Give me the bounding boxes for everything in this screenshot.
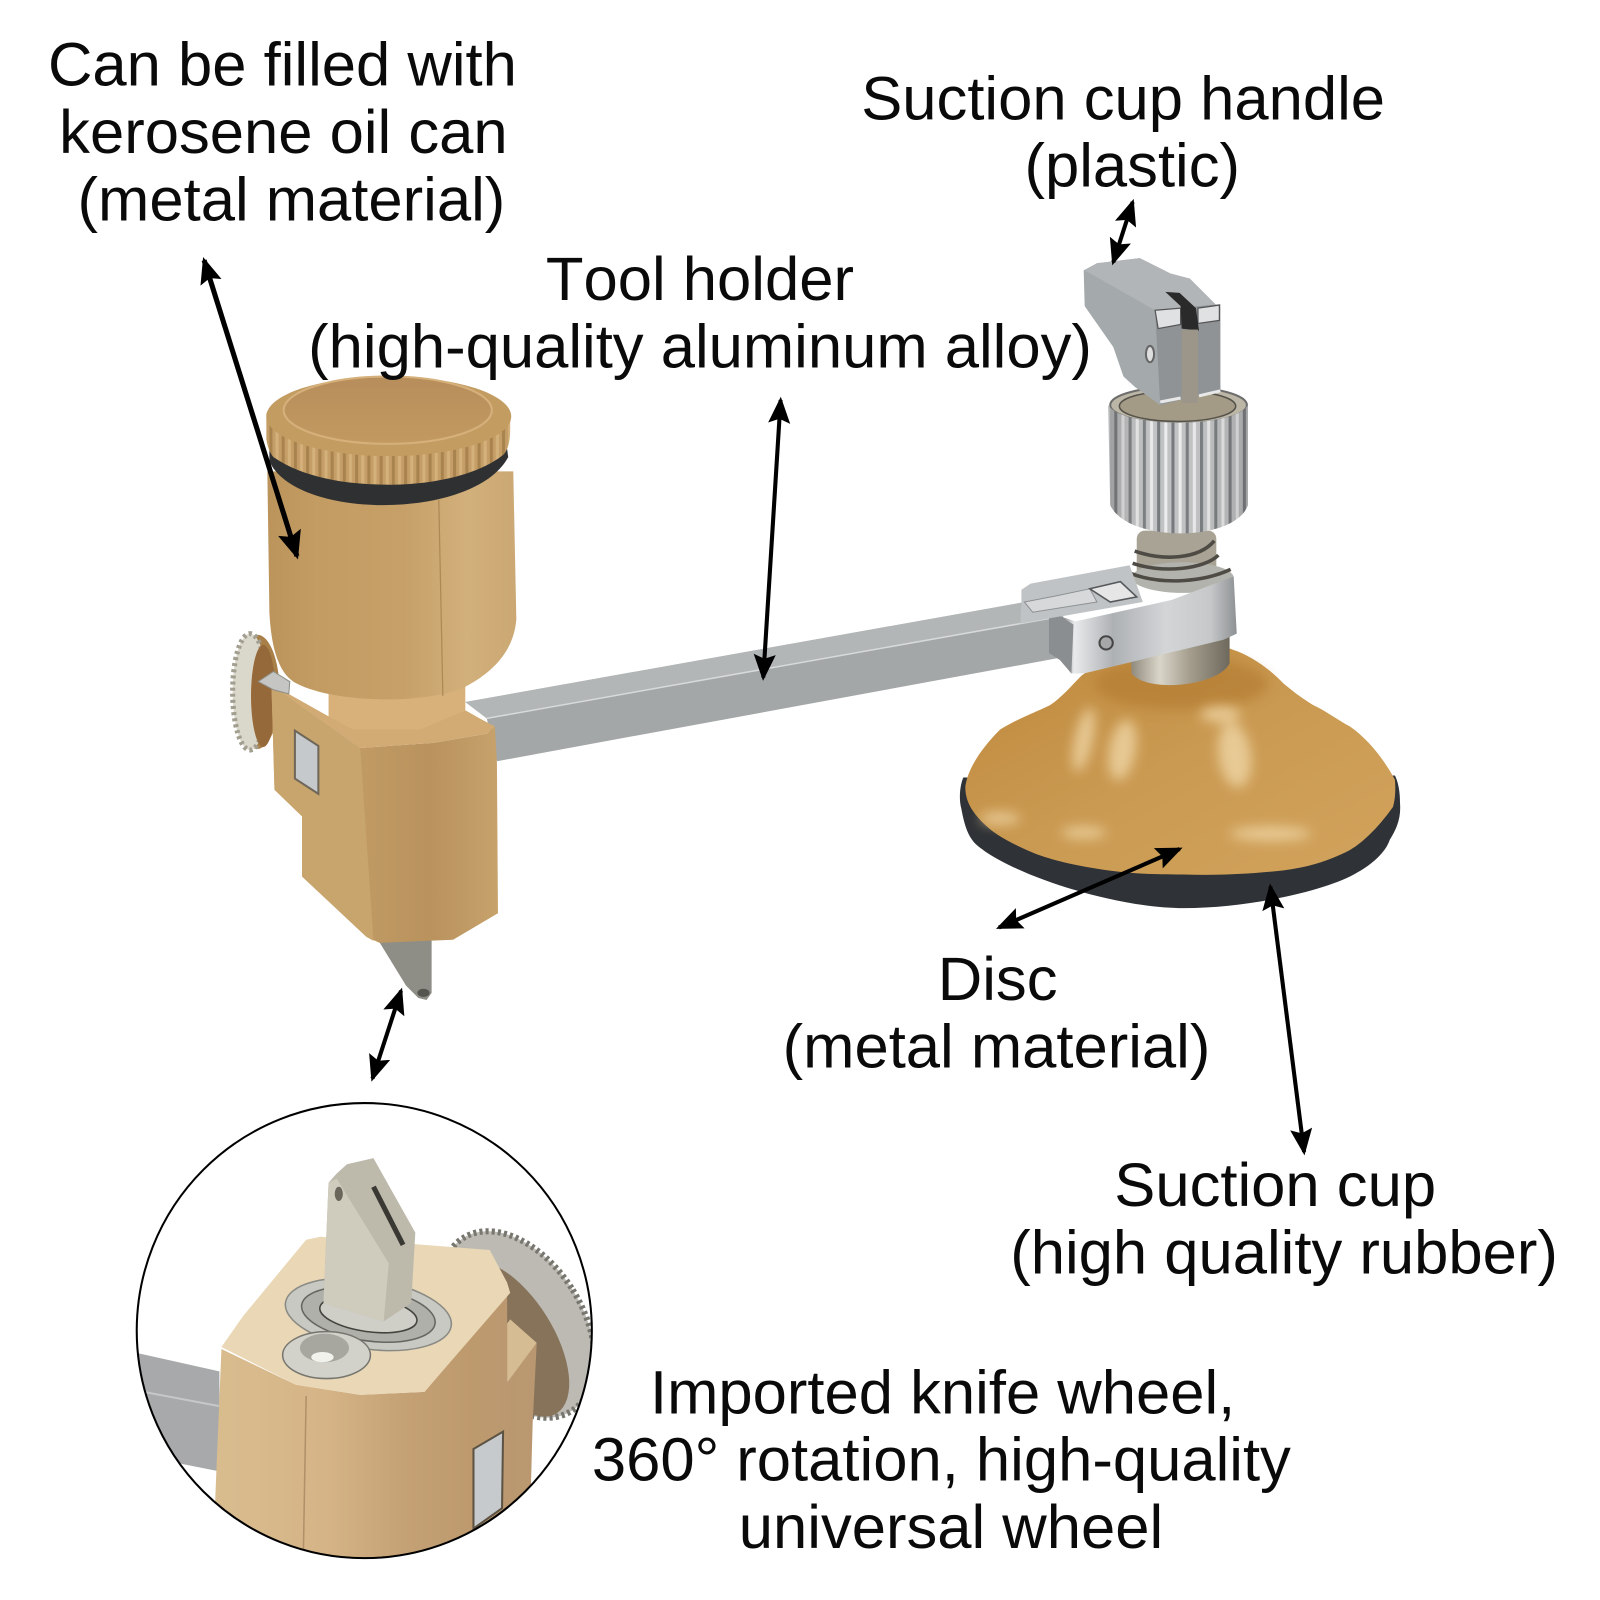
tool holder arm — [465, 601, 1063, 761]
arrow: oil can — [204, 260, 297, 556]
label: knife wheel: universal wheel — [739, 1493, 1163, 1562]
label: suction cup: (high quality rubber) — [1010, 1218, 1558, 1287]
metal disc dome — [965, 646, 1395, 875]
chrome bracket — [1049, 577, 1237, 673]
inset arm — [133, 1352, 219, 1471]
label: knife wheel: 360° rotation, high-quality — [592, 1426, 1291, 1495]
knurled nut — [1108, 387, 1248, 533]
inset blade holder — [323, 1158, 415, 1321]
label: knife wheel: Imported knife wheel, — [650, 1358, 1235, 1427]
oil can and cutter head — [233, 377, 516, 1000]
screw — [283, 1332, 370, 1379]
bracket top plate — [1020, 565, 1143, 623]
head block lower — [271, 685, 498, 943]
rubber o-ring — [269, 449, 508, 505]
arrow: suction cup handle — [1113, 202, 1133, 262]
label: disc — [783, 945, 1210, 1081]
arrow: disc — [999, 849, 1180, 928]
inset circle: knife wheel close-up — [133, 1103, 627, 1571]
label: suction cup — [1010, 1151, 1558, 1287]
rubber suction cup — [960, 776, 1400, 908]
label: oil can: (metal material) — [78, 165, 505, 234]
label: suction cup handle — [861, 64, 1385, 201]
square window — [295, 731, 318, 794]
inset block faces — [212, 1294, 537, 1571]
plastic handle — [1084, 258, 1220, 405]
label: oil can — [48, 31, 517, 234]
label: suction cup handle: Suction cup handle — [861, 64, 1385, 133]
inset window — [473, 1432, 503, 1529]
label: tool holder: (high-quality aluminum alloy) — [308, 312, 1092, 381]
arrow: tool holder — [763, 400, 781, 678]
suction cup assembly — [960, 258, 1400, 908]
can body — [267, 471, 516, 699]
dome highlights — [980, 706, 1311, 841]
label: suction cup: Suction cup — [1114, 1151, 1436, 1220]
base cylinder — [1130, 624, 1230, 685]
inset knob — [451, 1228, 591, 1421]
dome shadow near cylinder — [1095, 657, 1268, 710]
side thumb knob — [233, 634, 280, 750]
arrow: knife wheel — [372, 991, 401, 1079]
handle slot — [1165, 292, 1199, 331]
label: oil can: kerosene oil can — [59, 98, 508, 167]
upper block face — [271, 685, 495, 748]
label: tool holder — [308, 245, 1092, 381]
label: oil can: Can be filled with — [48, 31, 517, 100]
bearing — [284, 1278, 452, 1352]
arrow: suction cup — [1270, 887, 1304, 1152]
knurled cap — [266, 377, 511, 485]
spring — [1131, 531, 1234, 593]
label: disc: (metal material) — [783, 1012, 1210, 1081]
neck — [329, 686, 465, 731]
label: suction cup handle: (plastic) — [1024, 132, 1240, 201]
label: tool holder: Tool holder — [546, 245, 854, 314]
label: knife wheel — [592, 1358, 1291, 1562]
small tab — [258, 671, 290, 694]
label: disc: Disc — [938, 945, 1057, 1014]
inset block top — [221, 1237, 510, 1395]
cutting blade — [379, 939, 432, 1000]
